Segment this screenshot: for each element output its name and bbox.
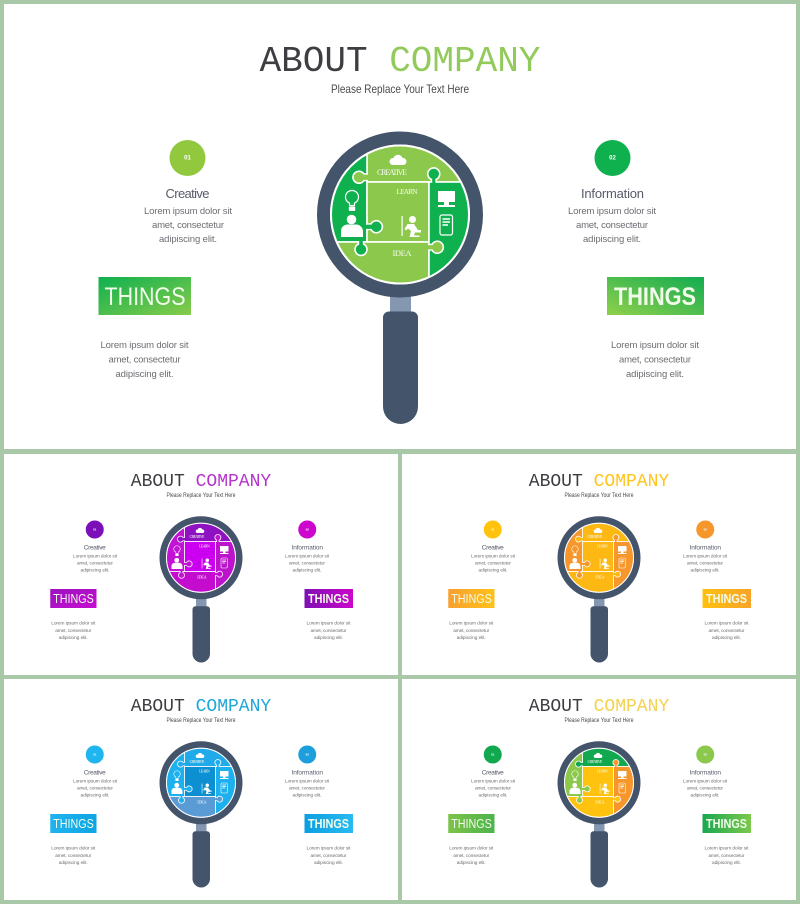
heading: Creative: Creative: [482, 544, 504, 552]
THINGS box right: [702, 814, 751, 833]
subtitle: Please Replace Your Text Here: [166, 718, 236, 724]
icon: magnifying glass with puzzle lens: CREATIVE: [190, 534, 205, 539]
text block: right top: amet, consectetur: [289, 786, 325, 792]
icon: magnifying glass with puzzle lens: CREATIVE: [588, 534, 603, 539]
text block: right bottom: [704, 846, 749, 866]
text block: right bottom: Lorem ipsum dolor sit: [704, 846, 749, 852]
text block: left bottom: [51, 846, 96, 866]
text block: right bottom: amet, consectetur: [708, 628, 745, 634]
text block: right bottom: amet, consectetur: [619, 354, 691, 366]
title: ABOUT COMPANY: [529, 472, 669, 492]
text block: right bottom: [611, 340, 699, 380]
text block: left top: amet, consectetur: [475, 560, 511, 566]
badge 02: [594, 140, 630, 176]
text block: right top: adipiscing elit.: [292, 792, 322, 798]
text block: right top: Lorem ipsum dolor sit: [285, 554, 330, 560]
text block: right top: adipiscing elit.: [690, 568, 720, 574]
badge 01: [86, 746, 104, 764]
text block: left top: amet, consectetur: [77, 560, 113, 566]
THINGS box left: THINGS: [451, 592, 492, 606]
badge 01: [86, 520, 104, 538]
text block: left bottom: [449, 846, 494, 866]
badge 02: [298, 746, 316, 764]
heading: Creative: Creative: [84, 544, 106, 552]
text block: left top: [471, 554, 516, 574]
heading: Creative: Creative: [482, 770, 504, 776]
text block: left bottom: Lorem ipsum dolor sit: [51, 620, 96, 626]
text block: right top: adipiscing elit.: [583, 234, 641, 245]
text block: right top: amet, consectetur: [576, 220, 648, 231]
subtitle: Please Replace Your Text Here: [564, 718, 634, 724]
text block: left top: adipiscing elit.: [80, 792, 110, 798]
icon: magnifying glass with puzzle lens: CREATIVE: [588, 759, 603, 764]
panel: blue slide: [4, 679, 398, 900]
icon: magnifying glass with puzzle lens: [544, 740, 654, 888]
text block: right bottom: adipiscing elit.: [314, 635, 343, 641]
panel: main green slide: [4, 4, 796, 449]
badge 01: [484, 520, 502, 538]
badge 01: [170, 140, 206, 176]
text block: left top: adipiscing elit.: [80, 568, 110, 574]
THINGS box right: [304, 814, 353, 833]
THINGS box right: [702, 589, 751, 608]
text block: right bottom: Lorem ipsum dolor sit: [704, 620, 749, 626]
text block: left top: [73, 554, 118, 574]
icon: magnifying glass with puzzle lens: LEARN: [597, 770, 608, 774]
icon: magnifying glass with puzzle lens: IDEA: [197, 574, 208, 580]
text block: right bottom: adipiscing elit.: [712, 635, 741, 641]
text block: right top: [683, 554, 728, 574]
THINGS box right: [607, 277, 704, 315]
text block: left bottom: Lorem ipsum dolor sit: [449, 620, 494, 626]
THINGS box left: THINGS: [53, 592, 94, 606]
THINGS box left: [448, 589, 494, 608]
text block: left bottom: [100, 340, 189, 380]
text block: left bottom: Lorem ipsum dolor sit: [449, 846, 494, 852]
badge 01: 01: [184, 156, 191, 162]
icon: magnifying glass with puzzle lens: LEARN: [199, 544, 210, 548]
text block: right top: Lorem ipsum dolor sit: [683, 554, 728, 560]
text block: right bottom: amet, consectetur: [310, 853, 347, 859]
THINGS box left: [98, 277, 191, 315]
badge 02: 02: [704, 752, 707, 756]
THINGS box left: [448, 814, 494, 833]
text block: right top: [568, 206, 656, 245]
text block: right top: Lorem ipsum dolor sit: [568, 206, 656, 217]
subtitle: Please Replace Your Text Here: [166, 493, 236, 499]
icon: magnifying glass with puzzle lens: IDEA: [197, 800, 208, 804]
text block: right top: adipiscing elit.: [690, 792, 720, 798]
text block: right bottom: [306, 620, 351, 641]
text block: left bottom: [449, 620, 494, 641]
badge 02: [696, 520, 714, 538]
text block: left bottom: adipiscing elit.: [457, 860, 486, 866]
badge 01: 01: [93, 527, 97, 531]
THINGS box right: THINGS: [706, 817, 747, 831]
heading: Information: Information: [690, 770, 721, 776]
icon: magnifying glass with puzzle lens: [544, 516, 654, 662]
icon: magnifying glass with puzzle lens: LEARN: [597, 544, 608, 548]
badge 02: [696, 746, 714, 764]
icon: magnifying glass with puzzle lens: IDEA: [392, 248, 412, 258]
text block: left top: adipiscing elit.: [159, 234, 217, 245]
text block: right bottom: [704, 620, 749, 641]
icon: magnifying glass with puzzle lens: LEARN: [396, 187, 418, 196]
text block: right bottom: amet, consectetur: [708, 853, 745, 859]
text block: right top: Lorem ipsum dolor sit: [285, 778, 330, 784]
text block: right top: adipiscing elit.: [292, 568, 322, 574]
text block: left top: adipiscing elit.: [478, 568, 508, 574]
title: ABOUT COMPANY: [260, 41, 540, 82]
text block: right bottom: [306, 846, 351, 866]
text block: right top: [285, 554, 330, 574]
heading: Information: Information: [690, 544, 721, 552]
icon: magnifying glass with puzzle lens: IDEA: [595, 574, 606, 580]
subtitle: Please Replace Your Text Here: [564, 493, 634, 499]
title: ABOUT COMPANY: [131, 472, 271, 492]
text block: right bottom: adipiscing elit.: [314, 860, 343, 866]
badge 02: [298, 520, 316, 538]
text block: right bottom: amet, consectetur: [310, 628, 347, 634]
text block: left top: Lorem ipsum dolor sit: [73, 778, 118, 784]
panel: purple slide: [4, 454, 398, 675]
THINGS box right: THINGS: [614, 283, 696, 311]
text block: left bottom: adipiscing elit.: [116, 369, 174, 380]
panel: orange slide: [402, 454, 796, 675]
icon: magnifying glass with puzzle lens: [146, 740, 256, 888]
text block: left top: [73, 778, 118, 798]
text block: left bottom: amet, consectetur: [108, 354, 180, 366]
THINGS box right: THINGS: [308, 592, 349, 606]
heading: Creative: Creative: [166, 186, 210, 201]
badge 02: 02: [306, 527, 309, 531]
text block: right top: amet, consectetur: [687, 560, 723, 566]
text block: left bottom: amet, consectetur: [55, 853, 92, 859]
badge 02: 02: [609, 156, 616, 162]
THINGS box right: THINGS: [308, 817, 349, 831]
text block: left top: amet, consectetur: [152, 220, 224, 231]
title: ABOUT COMPANY: [529, 697, 669, 717]
icon: magnifying glass with puzzle lens: CREATIVE: [190, 759, 205, 764]
THINGS box left: THINGS: [451, 817, 492, 831]
text block: left bottom: Lorem ipsum dolor sit: [100, 340, 189, 351]
icon: magnifying glass with puzzle lens: [290, 130, 509, 424]
text block: right bottom: Lorem ipsum dolor sit: [611, 340, 699, 351]
subtitle: Please Replace Your Text Here: [331, 82, 469, 96]
text block: left top: Lorem ipsum dolor sit: [471, 778, 516, 784]
text block: left bottom: adipiscing elit.: [457, 635, 486, 641]
text block: left top: adipiscing elit.: [478, 792, 508, 798]
text block: left bottom: amet, consectetur: [453, 628, 490, 634]
text block: left top: [144, 206, 232, 245]
text block: left top: [471, 778, 516, 798]
badge 01: [484, 746, 502, 764]
text block: left bottom: Lorem ipsum dolor sit: [51, 846, 96, 852]
text block: right bottom: Lorem ipsum dolor sit: [306, 846, 351, 852]
text block: right top: [683, 778, 728, 798]
title: ABOUT COMPANY: [131, 697, 271, 717]
text block: right top: amet, consectetur: [687, 786, 723, 792]
icon: magnifying glass with puzzle lens: [146, 516, 256, 662]
text block: left top: Lorem ipsum dolor sit: [144, 206, 232, 217]
THINGS box left: THINGS: [53, 817, 94, 831]
heading: Information: Information: [292, 544, 323, 552]
badge 01: 01: [491, 752, 495, 756]
text block: right bottom: adipiscing elit.: [626, 369, 684, 380]
THINGS box right: [304, 589, 353, 608]
text block: right top: [285, 778, 330, 798]
THINGS box right: THINGS: [706, 592, 747, 606]
text block: left bottom: amet, consectetur: [453, 853, 490, 859]
text block: left top: Lorem ipsum dolor sit: [471, 554, 516, 560]
badge 02: 02: [306, 752, 309, 756]
THINGS box left: [50, 589, 96, 608]
text block: left top: Lorem ipsum dolor sit: [73, 554, 118, 560]
icon: magnifying glass with puzzle lens: IDEA: [595, 800, 606, 804]
badge 01: 01: [491, 527, 495, 531]
heading: Information: Information: [292, 770, 323, 776]
icon: magnifying glass with puzzle lens: CREATIVE: [377, 168, 407, 177]
text block: right bottom: adipiscing elit.: [712, 860, 741, 866]
text block: left bottom: adipiscing elit.: [59, 635, 88, 641]
text block: left top: amet, consectetur: [77, 786, 113, 792]
text block: left bottom: amet, consectetur: [55, 628, 92, 634]
heading: Creative: Creative: [84, 770, 106, 776]
text block: left top: amet, consectetur: [475, 786, 511, 792]
heading: Information: Information: [581, 186, 644, 201]
icon: magnifying glass with puzzle lens: LEARN: [199, 770, 210, 774]
text block: right top: Lorem ipsum dolor sit: [683, 778, 728, 784]
text block: left bottom: adipiscing elit.: [59, 860, 88, 866]
THINGS box left: [50, 814, 96, 833]
text block: right bottom: Lorem ipsum dolor sit: [306, 620, 351, 626]
text block: left bottom: [51, 620, 96, 641]
badge 02: 02: [704, 527, 707, 531]
THINGS box left: THINGS: [104, 283, 186, 311]
badge 01: 01: [93, 752, 97, 756]
text block: right top: amet, consectetur: [289, 560, 325, 566]
panel: multicolour slide: [402, 679, 796, 900]
